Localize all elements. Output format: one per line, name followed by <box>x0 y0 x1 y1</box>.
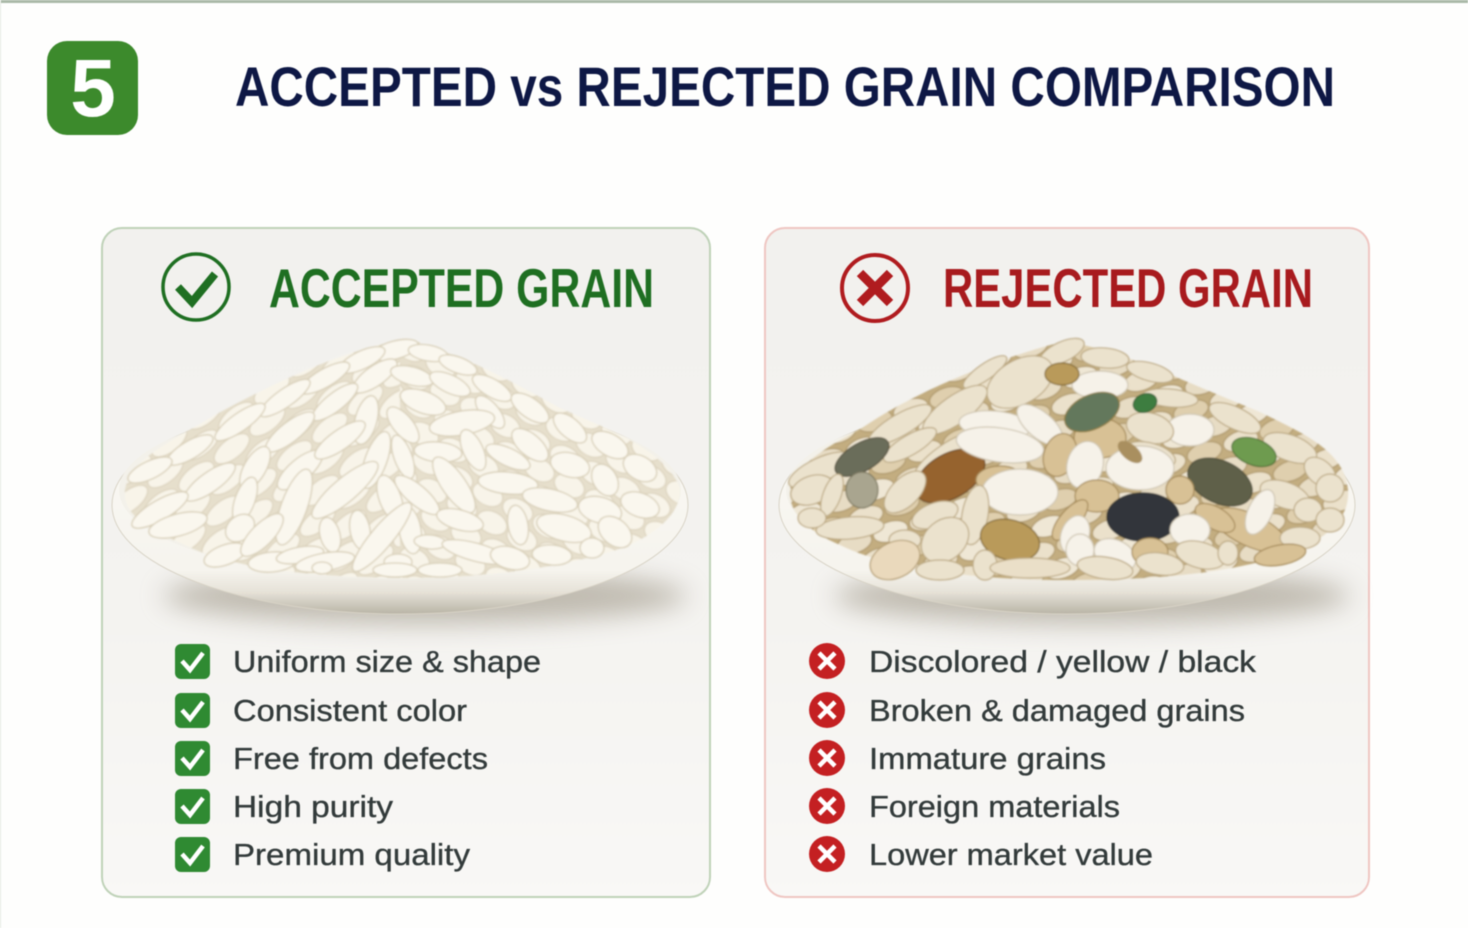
panel: accepted grain <box>102 228 710 897</box>
item: free from defects: Free from defects <box>233 741 488 776</box>
item: broken and damaged: Broken & damaged grains <box>869 693 1245 728</box>
checklist: rejected traits <box>809 643 1257 872</box>
illustration: plate of uniform white rice <box>112 335 688 624</box>
item: high purity: High purity <box>233 789 394 824</box>
heading: rejected grain: REJECTED GRAIN <box>943 257 1313 319</box>
defects: pods and dark pieces <box>829 430 895 484</box>
rice mass: right half <box>400 342 680 578</box>
step number badge: 5 <box>70 43 116 134</box>
defect: black stone <box>1107 493 1179 541</box>
grain mass <box>790 342 1348 580</box>
illustration: plate of mixed defective grain <box>779 333 1355 624</box>
item: discolored: Discolored / yellow / black <box>869 644 1257 679</box>
item: consistent color: Consistent color <box>233 693 467 728</box>
icon: rejected cross circle <box>842 255 908 321</box>
item: foreign materials: Foreign materials <box>869 789 1120 824</box>
item: uniform size and shape: Uniform size & shape <box>233 644 541 679</box>
icon: accepted check circle <box>163 254 229 320</box>
heading: accepted grain: ACCEPTED GRAIN <box>269 257 654 319</box>
panel: rejected grain <box>765 228 1369 897</box>
item: high purity <box>175 789 394 824</box>
item: premium quality: Premium quality <box>233 837 471 872</box>
item: immature grains: Immature grains <box>869 741 1106 776</box>
step number badge <box>47 41 138 135</box>
item: lower market value: Lower market value <box>869 837 1153 872</box>
checklist: accepted traits <box>175 644 541 872</box>
rice mass: left half <box>125 342 420 578</box>
